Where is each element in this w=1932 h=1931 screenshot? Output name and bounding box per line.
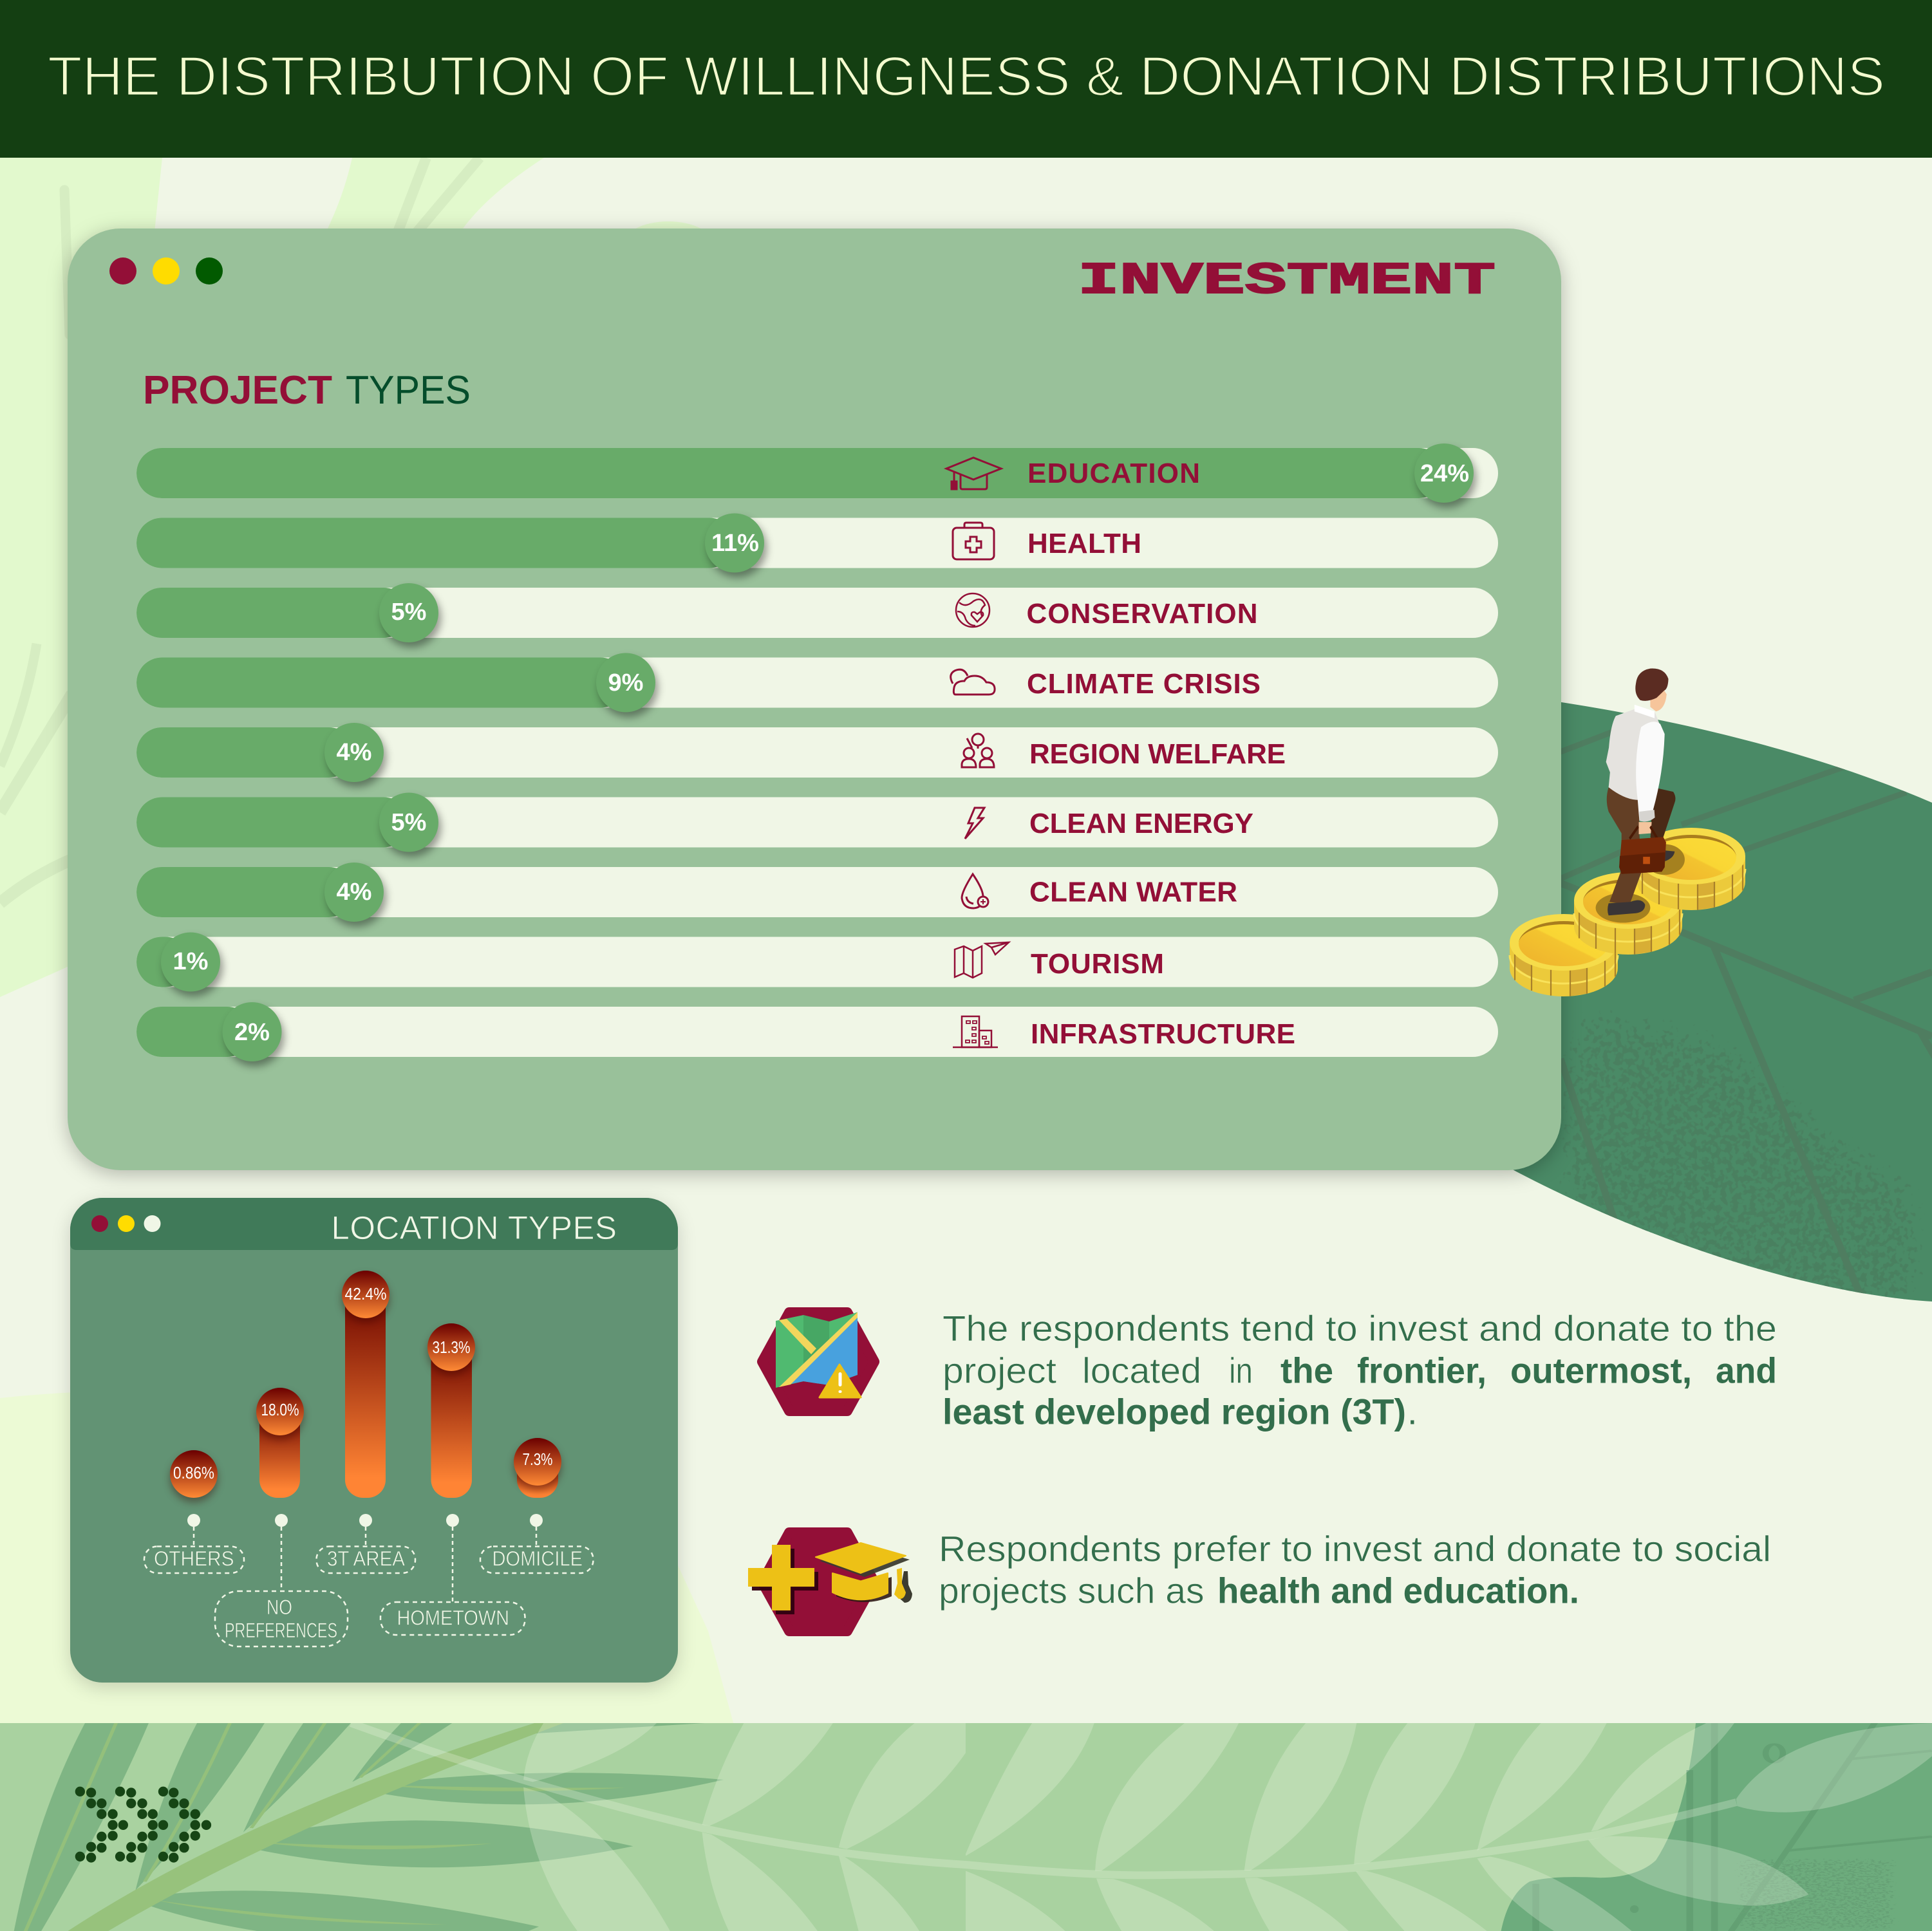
value bubble 4% [324, 723, 384, 782]
value bubble 11%: 11% [711, 530, 759, 557]
text block: 3T finding: and [1716, 1350, 1777, 1390]
label: REGION WELFARE [1029, 738, 1286, 770]
category label: others: OTHERS [154, 1547, 234, 1571]
icon: lightning bolt [965, 808, 984, 839]
value bubble 2% [223, 1002, 282, 1061]
text block: social projects finding [939, 1529, 1771, 1610]
label: CLEAN WATER [1029, 877, 1237, 908]
category label: no preferences [215, 1514, 348, 1646]
bar: no preferences 18.0% [256, 1388, 304, 1498]
bar: hometown 31.3%: 31.3% [433, 1338, 470, 1357]
category label: hometown: HOMETOWN [397, 1607, 509, 1630]
icon: map and paper plane [955, 942, 1009, 978]
value bubble 24%: 24% [1420, 460, 1469, 487]
icon: globe heart [956, 593, 989, 627]
heading: project types: PROJECT [143, 368, 332, 413]
value bubble 4%: 4% [337, 739, 371, 766]
label: INFRASTRUCTURE [1031, 1018, 1295, 1050]
dark palm blades left [14, 1721, 724, 1931]
label: CLIMATE CRISIS [1027, 668, 1261, 700]
label: CONSERVATION [1026, 598, 1258, 630]
text block: 3T finding: least developed region (3T) [943, 1392, 1406, 1432]
category label: 3T area: 3T AREA [327, 1547, 406, 1571]
row: clean water [136, 863, 1498, 922]
text block: 3T finding [943, 1308, 1777, 1432]
logo dots [75, 1787, 211, 1863]
text block: 3T finding: the [1280, 1350, 1333, 1390]
bar: others 0.86% [170, 1450, 218, 1498]
text block: 3T finding: . [1407, 1392, 1418, 1432]
text block: 3T finding: The respondents tend to invest and donate to the [943, 1308, 1777, 1348]
icon: map warning [762, 1312, 874, 1411]
value bubble 9% [596, 653, 655, 712]
heading: location types: LOCATION TYPES [331, 1209, 617, 1246]
category label: domicile [480, 1514, 594, 1573]
icon: people [962, 734, 994, 767]
row: infrastructure [136, 1002, 1498, 1061]
row: region welfare [136, 723, 1498, 782]
heading: project types [143, 368, 471, 413]
label: TOURISM [1031, 948, 1164, 980]
background foliage top left [0, 158, 715, 997]
label: CLEAN ENERGY [1029, 808, 1253, 839]
text block: 3T finding: project [943, 1350, 1056, 1390]
bar: hometown 31.3% [427, 1323, 475, 1498]
bar: others 0.86%: 0.86% [173, 1463, 214, 1482]
value bubble 5% [379, 583, 438, 642]
value bubble 1%: 1% [173, 948, 208, 975]
icon: health and education [748, 1533, 912, 1631]
panel: location types [70, 1198, 678, 1683]
category label: domicile: DOMICILE [492, 1547, 583, 1571]
label: HEALTH [1027, 528, 1141, 559]
label: EDUCATION [1027, 458, 1200, 489]
text block: 3T finding: located [1082, 1350, 1201, 1390]
icon: water drop [962, 874, 988, 908]
row: climate crisis [136, 653, 1498, 712]
value bubble 5%: 5% [391, 599, 426, 626]
title: THE DISTRIBUTION OF WILLINGNESS & DONATION DISTRIBUTIONS [48, 46, 1885, 107]
bar: 3T area 42.4% [342, 1271, 389, 1498]
icon: first aid kit [953, 523, 994, 559]
value bubble 24% [1414, 443, 1474, 503]
heading: project types: TYPES [346, 368, 471, 413]
dark leaf corner [1501, 1721, 1932, 1931]
icon: cloud and sun [951, 669, 995, 695]
row: clean energy [136, 793, 1498, 852]
text block: 3T finding: frontier, [1357, 1350, 1487, 1390]
value bubble 9%: 9% [608, 669, 643, 696]
bar: 3T area 42.4%: 42.4% [345, 1284, 386, 1303]
value bubble 4%: 4% [337, 879, 371, 906]
bar: domicile 7.3%: 7.3% [523, 1450, 552, 1469]
window dots [91, 1215, 161, 1232]
value bubble 2%: 2% [234, 1019, 270, 1046]
row: conservation [136, 583, 1498, 642]
category label: others [144, 1514, 244, 1573]
window dots [109, 257, 223, 285]
row: health [136, 514, 1498, 573]
category label: 3T area [317, 1514, 415, 1573]
icon: buildings [953, 1016, 998, 1047]
bar: no preferences 18.0%: 18.0% [261, 1400, 299, 1419]
text block: 3T finding: in [1229, 1350, 1253, 1390]
row: education [136, 443, 1498, 503]
text block: 3T finding: outermost, [1510, 1350, 1692, 1390]
category label: hometown [380, 1514, 525, 1635]
row: tourism [136, 932, 1498, 991]
value bubble 1% [161, 932, 220, 991]
category label: no preferences: PREFERENCES [225, 1619, 337, 1642]
text block: social projects finding: Respondents prefer to invest and donate to social [939, 1529, 1771, 1569]
value bubble 11% [705, 514, 764, 573]
bar: domicile 7.3% [514, 1438, 561, 1498]
value bubble 5%: 5% [391, 809, 426, 836]
icon: graduation cap [946, 458, 1001, 489]
heading: investment: INVESTMENT [1078, 256, 1496, 307]
header band [0, 0, 1932, 158]
window title bar [70, 1198, 678, 1250]
text block: social projects finding: projects such as [939, 1571, 1204, 1610]
category label: no preferences: NO [267, 1596, 292, 1619]
background foliage bottom left [0, 1390, 734, 1725]
big dark leaf [1513, 702, 1932, 1301]
value bubble 5% [379, 793, 438, 852]
bar chart [170, 1271, 561, 1498]
text block: social projects finding: health and education. [1217, 1571, 1579, 1610]
panel: investment [68, 229, 1561, 1170]
value bubble 4% [324, 863, 384, 922]
coins [1510, 828, 1745, 996]
pale fern leaf [351, 1721, 1932, 1931]
bottom foliage band [0, 1721, 1932, 1931]
businessman figure [1596, 668, 1685, 923]
